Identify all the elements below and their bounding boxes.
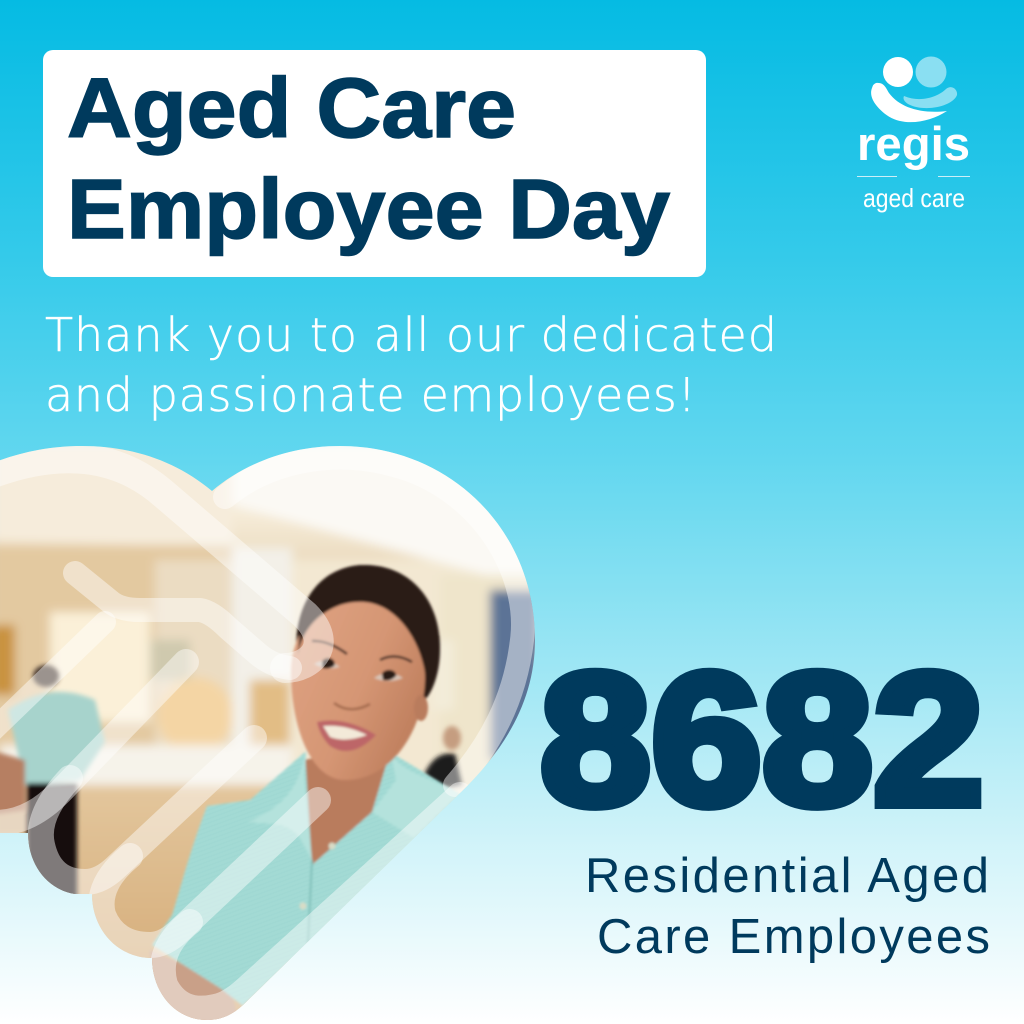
shirt <box>152 752 470 1006</box>
face <box>291 598 425 780</box>
background colleague: left <box>0 665 105 898</box>
caption line 1: Residential Aged <box>585 849 989 903</box>
handshake overlay <box>0 458 523 1009</box>
overlay: third finger loop <box>102 800 318 945</box>
logo wordmark: regis <box>857 117 970 170</box>
brows <box>312 641 412 662</box>
title line 1: Aged Care <box>67 61 516 155</box>
hairline <box>296 564 427 671</box>
logo tagline: aged care <box>863 183 965 213</box>
placket <box>307 860 314 942</box>
subtitle line 1: Thank you to all our dedicated <box>45 308 777 362</box>
caption line 2: Care Employees <box>597 910 990 964</box>
logo divider right <box>938 176 970 177</box>
photo background: blurred reception room <box>0 440 550 1024</box>
neck <box>304 757 387 865</box>
big number: 8682 <box>540 634 984 844</box>
overlay: left finger loop <box>0 662 186 823</box>
irises <box>322 658 396 680</box>
overlay: second finger loop <box>41 738 254 882</box>
buttons <box>328 842 336 850</box>
teeth <box>323 726 367 740</box>
nose <box>334 703 370 709</box>
collar right <box>373 758 454 836</box>
icon: light head <box>916 56 946 88</box>
icon: light swoosh <box>904 87 957 108</box>
logo divider left <box>857 176 897 177</box>
logo: regis aged care <box>857 56 970 213</box>
overlay: top hand outline and thumb <box>0 458 319 668</box>
overlay: horizontal finger <box>75 573 290 668</box>
subtitle <box>45 308 777 422</box>
eye whites <box>314 661 403 681</box>
mouth <box>317 721 376 751</box>
woman: nurse <box>150 565 470 1024</box>
collar left <box>248 749 312 860</box>
overlay: first finger <box>0 622 105 738</box>
background person: right <box>424 726 462 790</box>
icon: white head <box>883 57 913 87</box>
ear <box>414 695 428 721</box>
title line 2: Employee Day <box>67 162 670 256</box>
overlay: fourth finger loop <box>163 795 460 1009</box>
overlay: right lobe band <box>225 458 523 785</box>
number caption <box>585 849 990 964</box>
subtitle line 2: and passionate employees! <box>45 368 696 422</box>
arm <box>152 958 236 1020</box>
heart photo panel <box>0 440 550 1024</box>
title panel <box>43 50 706 277</box>
hair back <box>296 565 440 700</box>
icon: white swoosh <box>871 83 947 122</box>
